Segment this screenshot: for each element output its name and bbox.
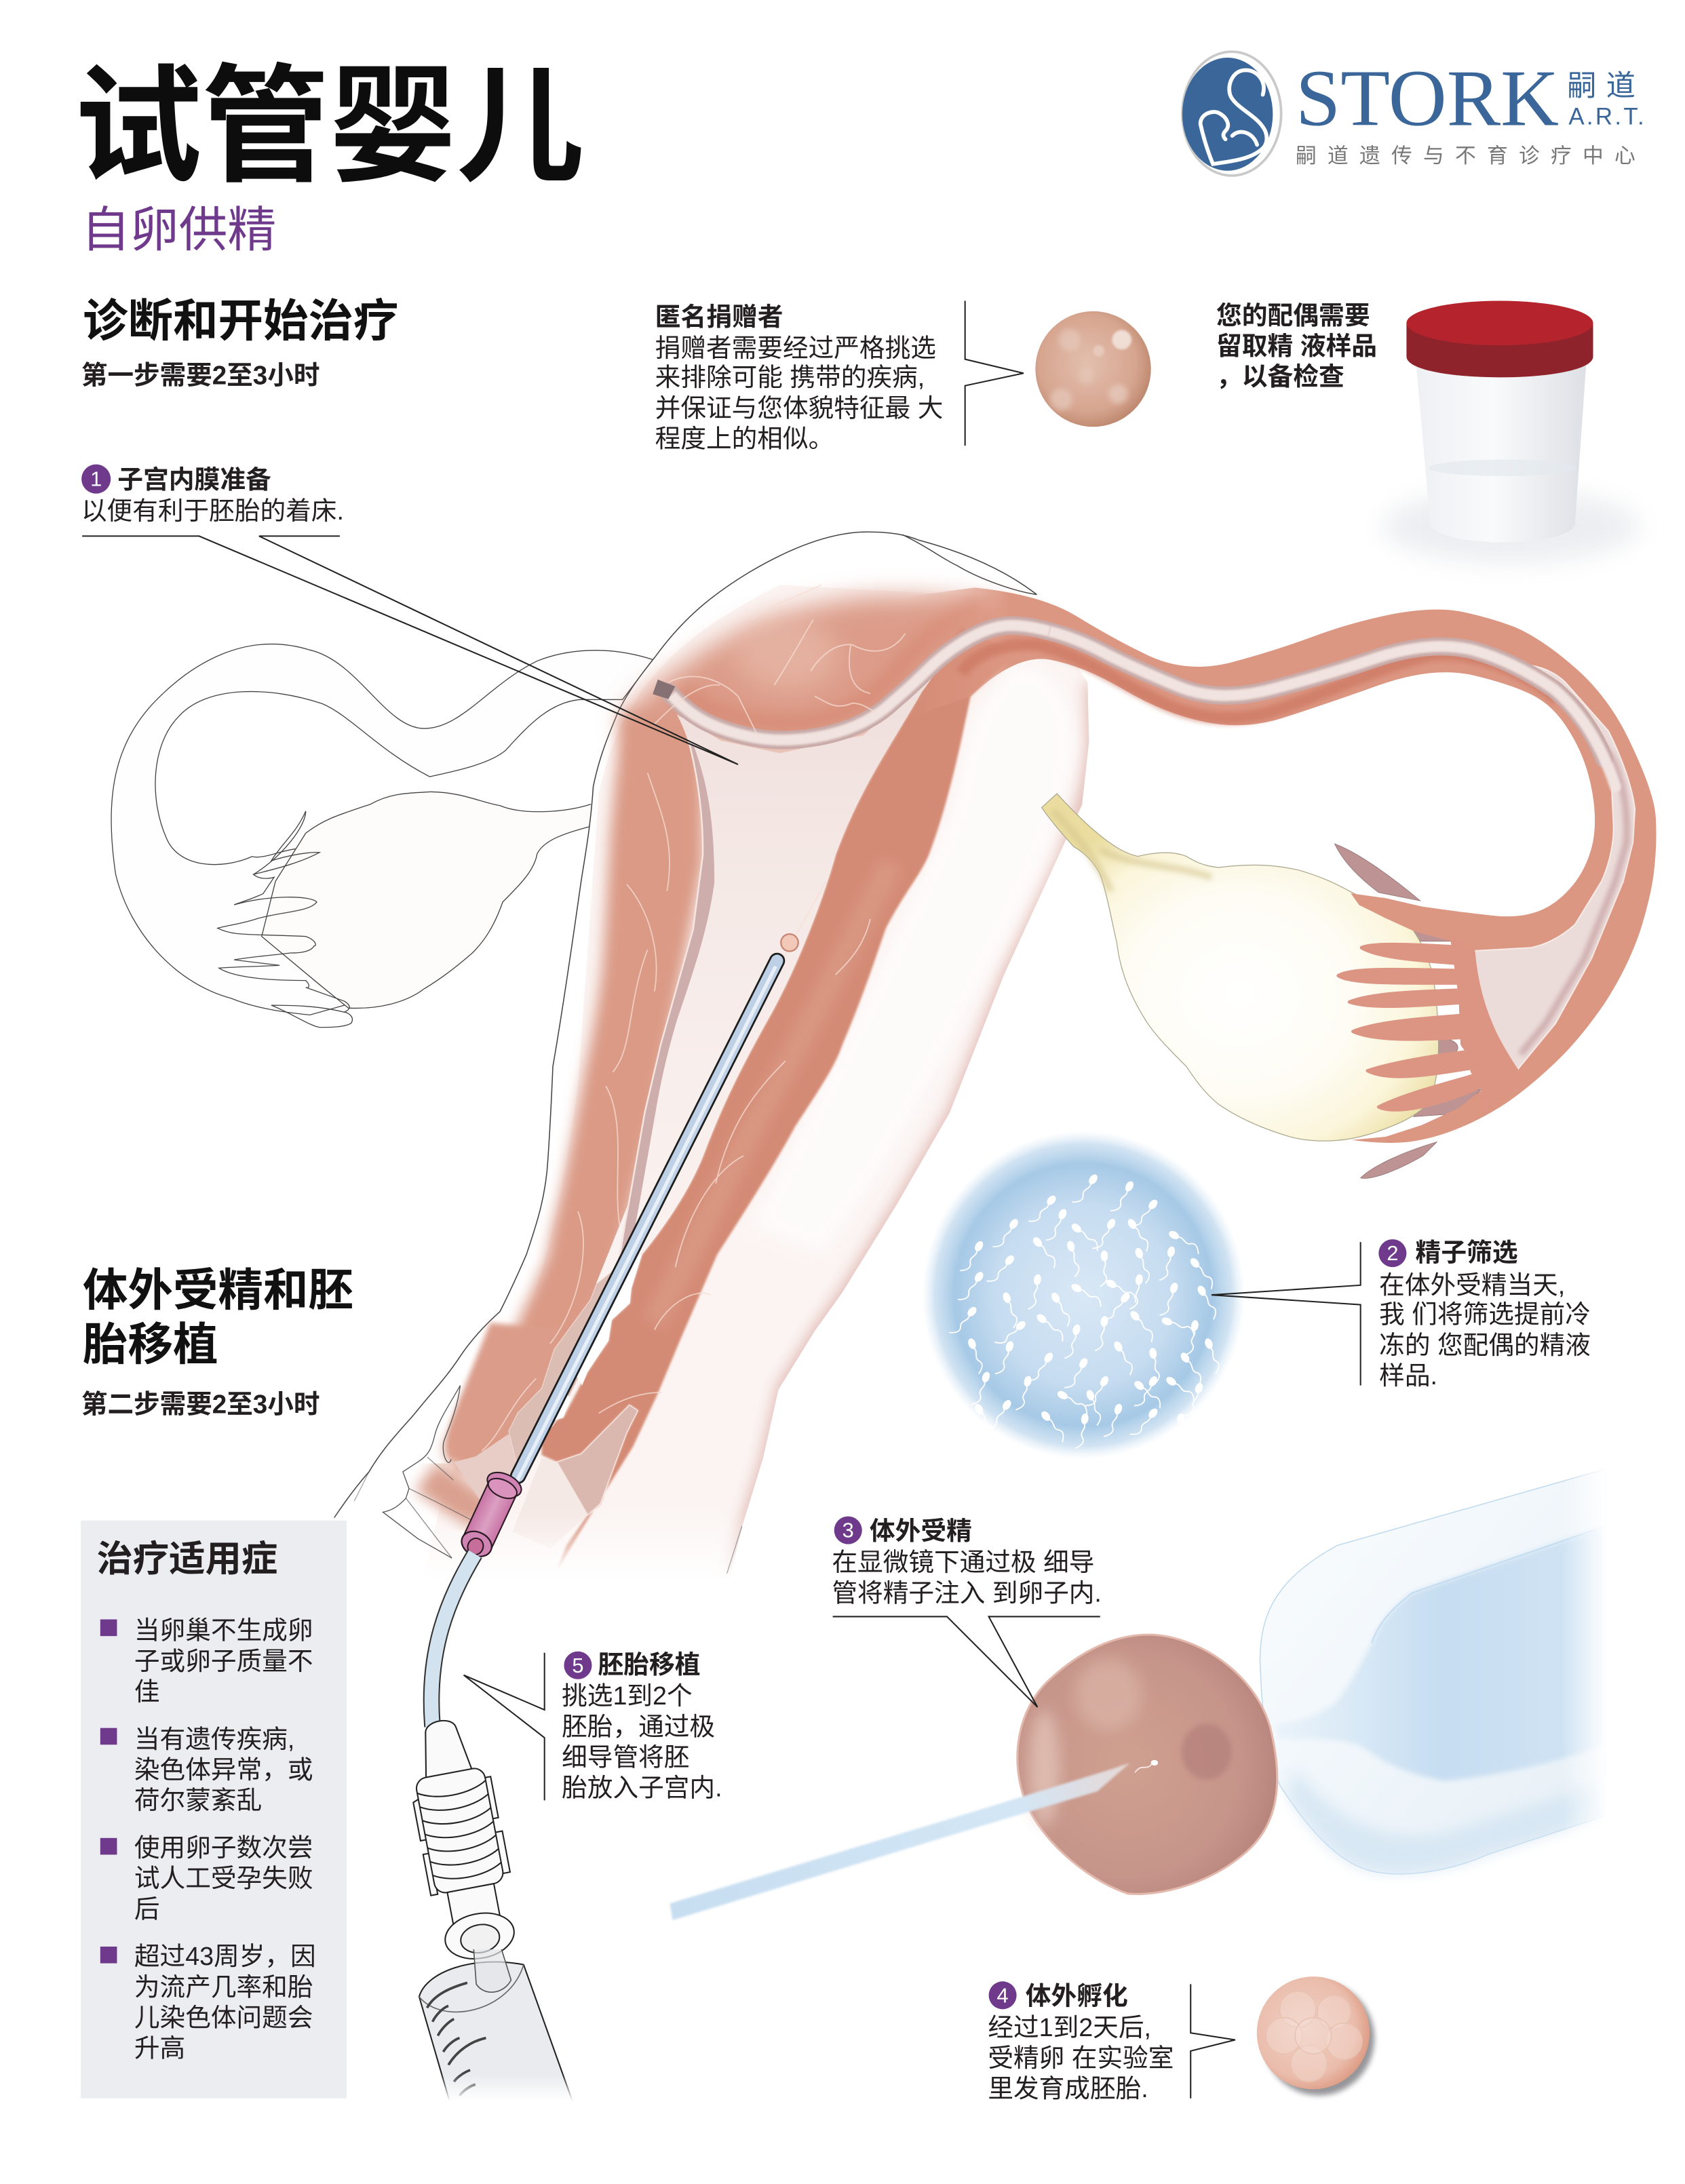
pronucleus (1182, 1724, 1232, 1780)
indication 2: 荷尔蒙紊乱 (134, 1786, 262, 1814)
partner sample text: 您的配偶需要 (1216, 302, 1370, 330)
title: 试管婴儿 (75, 56, 584, 198)
indication 4: 超过43周岁，因 (134, 1942, 316, 1970)
indication 1: 子或卵子质量不 (134, 1647, 313, 1675)
indication 3 (100, 1833, 313, 1923)
step 5 number badge (564, 1652, 592, 1679)
indication 4: 儿染色体问题会 (134, 2003, 313, 2031)
logo tagline: 嗣道遗传与不育诊疗中心 (1296, 144, 1646, 168)
fundus light area (734, 619, 840, 690)
donor heading: 匿名捐赠者 (655, 303, 783, 332)
cavity and lumen inside uterus (482, 585, 1050, 1469)
tube lumen shadow (668, 625, 1604, 759)
ghost ovary (262, 792, 591, 1008)
panel: indications (81, 1521, 347, 2099)
step 3 body: 管将精子注入 到卵子内. (832, 1578, 1102, 1607)
icon: embryo (1257, 1976, 1374, 2096)
subtitle: 自卵供精 (81, 203, 276, 258)
step 4 body: 经过1到2天后, (988, 2013, 1151, 2042)
ovary body (1042, 794, 1439, 1141)
syringe barrel (419, 1962, 578, 2116)
icon: donor egg (1035, 311, 1151, 427)
partner sample text: ，以备检查 (1216, 363, 1344, 391)
tube lumen light (671, 625, 1615, 787)
ghost left fallopian tube and ovary (111, 644, 653, 1028)
pale fold left of catheter (509, 1260, 627, 1469)
step 4 bracket (1190, 1984, 1235, 2099)
right fimbriae (1338, 936, 1524, 1114)
indication 1: 当卵巢不生成卵 (134, 1616, 313, 1645)
connector neck (447, 1884, 501, 1931)
step 2 body: 冻的 您配偶的精液 (1379, 1331, 1591, 1359)
indication 3: 使用卵子数次尝 (134, 1833, 313, 1862)
syringe tick marks (427, 1983, 486, 2096)
catheter core (518, 961, 777, 1476)
syringe nozzle (473, 1940, 511, 1992)
white arch under tube (772, 679, 1062, 1236)
tube muscle (891, 587, 1657, 1143)
indication 2: 染色体异常，或 (134, 1755, 313, 1784)
step 2 label (1378, 1239, 1591, 1390)
heading: IVF and embryo transfer (83, 1266, 353, 1370)
indication 2 (100, 1725, 313, 1814)
step 5 body: 挑选1到2个 (562, 1681, 693, 1710)
step 4 number badge: 4 (997, 1983, 1009, 2007)
lumen through fundus shadow (668, 625, 1050, 740)
indication 1: 佳 (134, 1677, 160, 1706)
donor body: 并保证与您体貌特征最 大 (655, 393, 943, 422)
indication 4: 升高 (134, 2034, 185, 2063)
pipette lower tint (1288, 1768, 1606, 1873)
indication 2: 当有遗传疾病, (134, 1725, 294, 1753)
step 5 heading: 胚胎移植 (598, 1651, 701, 1679)
step 3 number badge (834, 1517, 862, 1544)
embryo in uterus (781, 934, 798, 952)
logo Chinese name: 嗣道 (1567, 70, 1645, 102)
donor body (655, 334, 943, 452)
step 5 label (562, 1651, 722, 1802)
step 2 number badge (1378, 1239, 1406, 1267)
step 1 number badge: 1 (90, 467, 102, 491)
step 5 body: 胚胎，通过极 (562, 1712, 715, 1740)
right ovary (1042, 794, 1439, 1141)
connector thread ridges (417, 1780, 503, 1884)
fundus muscle (621, 596, 1024, 780)
ghost fimbriae (218, 811, 352, 1028)
step 3 pointer (833, 1616, 1100, 1707)
cavity mauve lining (617, 745, 714, 1274)
connector wings (411, 1776, 511, 1896)
lumen through fundus light (671, 625, 1050, 740)
heading: diagnosis and treatment start: 诊断和开始治疗 (83, 296, 398, 347)
flexible tube (431, 1554, 475, 1727)
pipette glass (1260, 1469, 1606, 1874)
pipette upper line (1372, 1526, 1606, 1643)
injected sperm (1135, 1760, 1158, 1772)
lumen dark end (653, 680, 675, 699)
right fallopian tube (1334, 844, 1481, 1178)
uterine cavity (596, 657, 947, 1284)
left wall lower shadow (426, 1476, 484, 1518)
patch inner shading (1521, 710, 1627, 1054)
holding pipette (1260, 1469, 1606, 1874)
step 2 body: 在体外受精当天, (1379, 1271, 1565, 1300)
donor body: 捐赠者需要经过严格挑选 (655, 334, 936, 362)
connector thread body (414, 1767, 505, 1894)
step 1 number badge (81, 465, 111, 494)
step 2 heading: 精子筛选 (1416, 1239, 1518, 1267)
sample halo (922, 1131, 1245, 1459)
step one duration: 第一步需要2至3小时 (81, 362, 319, 391)
left uterine wall (443, 710, 703, 1476)
step 4 number badge (989, 1981, 1017, 2009)
step 3 heading: 体外受精 (870, 1517, 972, 1546)
uterus right edge shading (734, 682, 1096, 1580)
step 5 body (562, 1681, 722, 1802)
step 5 pointer (464, 1653, 545, 1800)
pale cervix triangle (512, 1458, 587, 1548)
panel background (81, 1521, 347, 2099)
step 5 number badge: 5 (572, 1654, 584, 1677)
egg highlight (1075, 1658, 1142, 1731)
ghost tube (111, 644, 653, 1015)
donor body: 程度上的相似。 (655, 424, 834, 452)
heading: IVF and embryo transfer: 胎移植 (83, 1320, 218, 1370)
step 5 body: 细导管将胚 (562, 1743, 689, 1772)
sperm cells (949, 1173, 1222, 1449)
step two duration: 第二步需要2至3小时 (81, 1390, 319, 1420)
fundus dark tone above lumen (682, 606, 982, 724)
cavity white edge line (618, 738, 703, 1260)
left lower lobe (444, 1319, 524, 1461)
donor bracket arrow (965, 300, 1024, 446)
step 5 body: 胎放入子宫内. (562, 1774, 722, 1802)
syringe (419, 1940, 578, 2116)
indication 1 (100, 1616, 313, 1706)
icon: specimen cup (1383, 300, 1639, 562)
step 2 pointer (1212, 1242, 1361, 1386)
ghost fimbria leaf (254, 811, 306, 874)
collar inner (459, 1922, 502, 1956)
left lower fold (454, 1434, 516, 1500)
injection needle (670, 1763, 1130, 1920)
pink catheter sleeve (455, 1468, 525, 1562)
uterus secondary outline (902, 534, 1037, 595)
egg body (1018, 1635, 1277, 1894)
connector nozzle (416, 1717, 473, 1780)
cervix fold (557, 1405, 638, 1515)
egg left rim light (1029, 1710, 1060, 1827)
donor body: 来排除可能 携带的疾病, (655, 363, 925, 391)
step 1 pointer (82, 536, 738, 764)
step 4 label (988, 1981, 1174, 2103)
step 2 body (1379, 1271, 1591, 1390)
tube body (668, 587, 1657, 1143)
logo A.R.T.: A.R.T. (1568, 104, 1646, 130)
step 1 heading: 子宫内膜准备 (117, 466, 271, 494)
step 1 label (81, 465, 344, 525)
catheter highlight (517, 967, 775, 1481)
indication 3: 后 (134, 1894, 160, 1923)
logo emblem (1182, 52, 1281, 176)
connector collar (442, 1907, 518, 1964)
step 2 body: 我 们将筛选提前冷 (1379, 1300, 1591, 1329)
catheter shaft (518, 961, 777, 1476)
anonymous donor text (655, 303, 943, 452)
partner sample text: 留取精 液样品 (1216, 332, 1377, 361)
right uterine wall (542, 627, 1016, 1571)
step 4 body: 受精卵 在实验室 (988, 2044, 1174, 2072)
step 2 body: 样品. (1379, 1361, 1437, 1390)
step 2 number badge: 2 (1387, 1241, 1398, 1265)
right wall highlight (655, 863, 891, 1323)
lumen widening and pale mesosalpinx patch (1473, 665, 1635, 1071)
syringe shoulder (419, 1965, 524, 2012)
step 4 body: 里发育成胚胎. (988, 2074, 1148, 2103)
partner sample text (1216, 302, 1377, 391)
lower band tone (961, 644, 1557, 718)
ovarian ligament shading (1053, 811, 1212, 891)
step 3 body (832, 1548, 1102, 1607)
indication 4 (100, 1942, 316, 2063)
sperm sample circle (922, 1131, 1245, 1459)
step 1 body: 以便有利于胚胎的着床. (81, 496, 344, 525)
luer connector (400, 1713, 525, 1966)
step 3 label (832, 1517, 1102, 1607)
step 3 body: 在显微镜下通过极 细导 (832, 1548, 1094, 1576)
logo wordmark: STORK (1296, 54, 1559, 143)
pipette inner cavity (1277, 1526, 1606, 1781)
step 3 number badge: 3 (842, 1519, 854, 1542)
step 4 heading: 体外孵化 (1026, 1983, 1128, 2011)
logo: Stork A.R.T. (1182, 52, 1646, 176)
panel heading: 治疗适用症 (96, 1540, 277, 1580)
uterus pale body (418, 585, 1089, 1601)
jagged white fold right of catheter (551, 1255, 642, 1422)
back fimbria leaves (1334, 844, 1481, 1178)
veins (482, 585, 905, 1451)
indication 3: 试人工受孕失败 (134, 1864, 313, 1892)
step 4 body (988, 2013, 1174, 2103)
cervix ghost lines (354, 1386, 742, 1574)
uterus outline (334, 532, 1037, 1518)
catheter (455, 934, 798, 1562)
heading: IVF and embryo transfer: 体外受精和胚 (83, 1266, 353, 1316)
fertilized egg (670, 1635, 1277, 1920)
uterus (334, 532, 1096, 1601)
indication 4: 为流产几率和胎 (134, 1972, 313, 2001)
